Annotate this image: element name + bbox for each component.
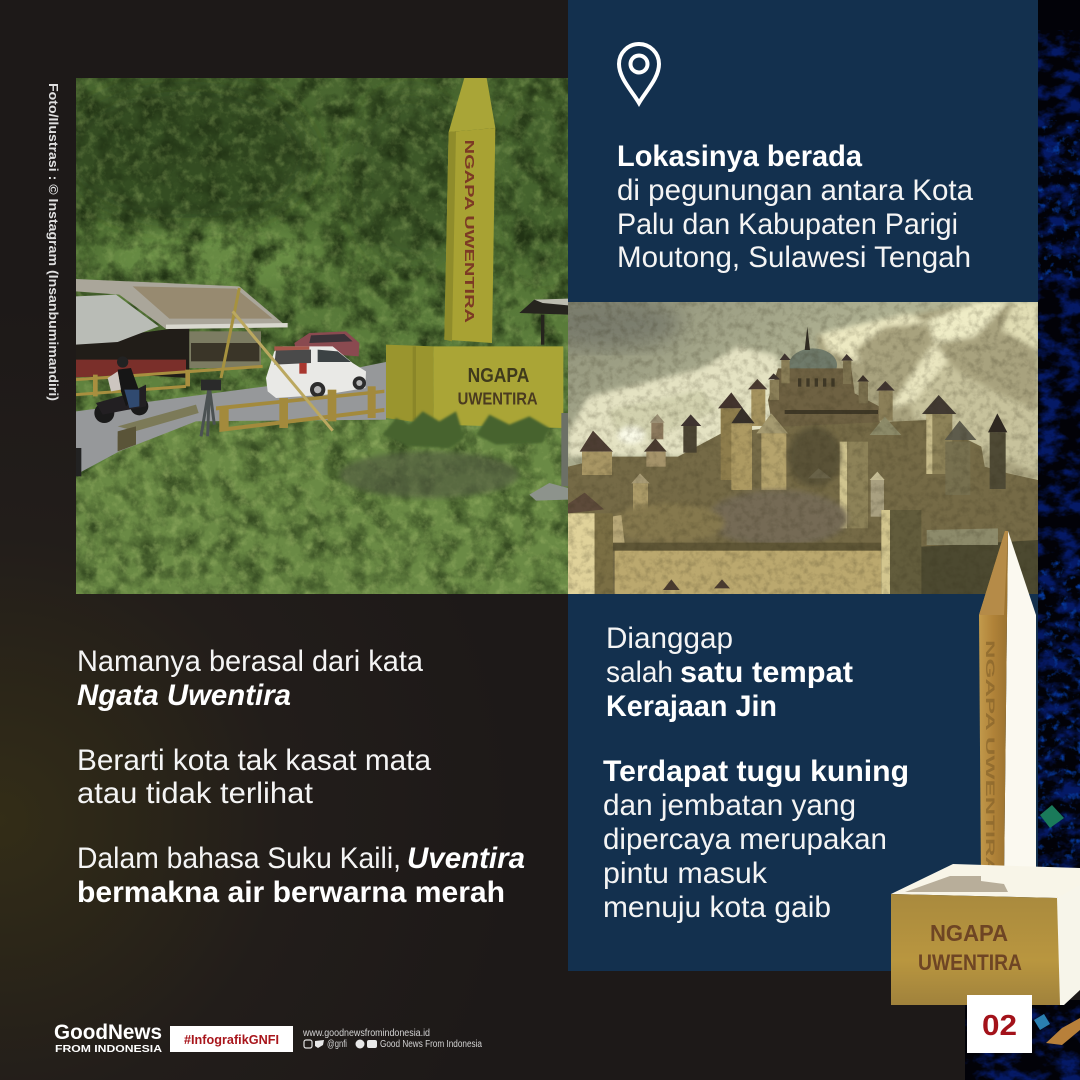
text block: name origin: Ngata Uwentira	[77, 679, 291, 712]
text block: yellow monument: menuju kota gaib	[603, 891, 831, 924]
page number: 02	[982, 1010, 1017, 1042]
text block: location: Moutong, Sulawesi Tengah	[617, 241, 971, 274]
text block: yellow monument: Terdapat tugu kuning	[603, 755, 909, 788]
cutout monument: NGAPA	[930, 920, 1008, 946]
road fence	[216, 386, 384, 432]
icon: location pin	[619, 44, 659, 103]
shrubs at base	[383, 411, 549, 448]
text block: name origin: atau tidak terlihat	[77, 777, 314, 810]
logo: GoodNews From Indonesia: FROM INDONESIA	[55, 1043, 162, 1055]
cutout monument: UWENTIRA	[918, 950, 1022, 975]
shack	[76, 279, 288, 378]
text block: yellow monument: dan jembatan yang	[603, 789, 856, 822]
dark shadow and gardens	[788, 427, 841, 487]
bamboo poles	[221, 288, 239, 378]
towers	[580, 392, 1007, 528]
obelisk	[444, 78, 495, 343]
text block: name origin: Berarti kota tak kasat mata	[77, 744, 431, 777]
logo: GoodNews From Indonesia: GoodNews	[54, 1021, 162, 1044]
photo: fantasy castle city	[535, 297, 1038, 594]
monument base: NGAPA	[468, 365, 529, 387]
text block: jinn kingdom	[606, 622, 853, 723]
text block: name origin: Uventira	[407, 842, 525, 875]
hashtag badge	[170, 1026, 293, 1052]
outer wall	[568, 493, 1038, 594]
text block: jinn kingdom: salah	[606, 656, 673, 689]
text block: yellow monument	[603, 755, 909, 924]
text block: name origin: Namanya berasal dari kata	[77, 645, 423, 678]
footer links and social icons: www.goodnewsfromindonesia.id	[302, 1028, 430, 1039]
central keep	[748, 326, 894, 427]
blue abstract texture strip	[965, 0, 1080, 1080]
text block: name origin	[77, 645, 525, 909]
cutout monument	[891, 531, 1080, 1005]
footer links and social icons: @gnfi	[327, 1039, 347, 1050]
red car	[294, 331, 359, 356]
text block: jinn kingdom: Dianggap	[606, 622, 733, 655]
photo: yellow monument by the road	[59, 78, 583, 594]
bicycle tripod	[201, 380, 221, 436]
text block: name origin: bermakna air berwarna merah	[77, 876, 505, 909]
obelisk: NGAPA UWENTIRA	[462, 140, 477, 324]
logo: GoodNews From Indonesia	[54, 1021, 162, 1055]
road	[76, 362, 386, 475]
credit line: Foto/Ilustrasi : © Instagram (Insanbumimandiri)	[46, 83, 61, 401]
wooden slab	[118, 405, 199, 451]
footer links and social icons: Good News From Indonesia	[380, 1039, 482, 1050]
text block: yellow monument: pintu masuk	[603, 857, 768, 890]
cutout monument: NGAPA UWENTIRA	[983, 640, 997, 876]
panel: myth and gate	[568, 594, 1038, 971]
monument base	[386, 345, 563, 428]
text block: location: Lokasinya berada	[617, 140, 862, 173]
footer links and social icons	[302, 1028, 482, 1050]
monument base: UWENTIRA	[458, 389, 538, 409]
mountains	[568, 302, 1038, 480]
page number	[967, 995, 1032, 1053]
text block: jinn kingdom: Kerajaan Jin	[606, 690, 777, 723]
text block: location: Palu dan Kabupaten Parigi	[617, 208, 958, 241]
text block: location	[617, 140, 973, 274]
white car	[266, 346, 366, 398]
right kiosk	[519, 299, 568, 345]
text block: yellow monument: dipercaya merupakan	[603, 823, 887, 856]
hashtag badge: #InfografikGNFI	[184, 1032, 279, 1047]
text block: jinn kingdom: satu tempat	[680, 656, 853, 689]
text block: name origin: Dalam bahasa Suku Kaili,	[77, 842, 401, 875]
motorbike and rider	[94, 356, 148, 423]
fence far	[76, 366, 263, 395]
panel: location	[568, 0, 1038, 303]
grass foreground	[76, 418, 568, 594]
castle mass	[568, 420, 1038, 594]
text block: location: di pegunungan antara Kota	[617, 174, 973, 207]
